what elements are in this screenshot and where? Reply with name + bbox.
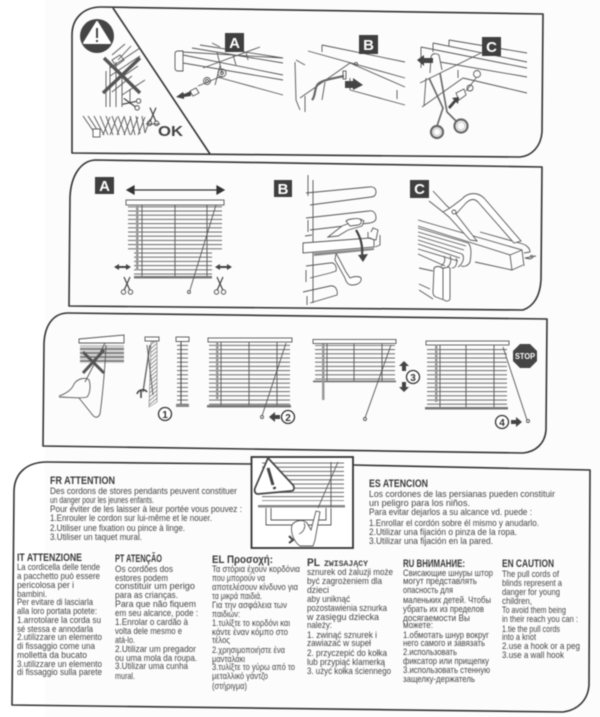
PT block: PT ATENÇÃO: [115, 552, 162, 565]
EN block: EN CAUTION: [502, 558, 554, 570]
IT block: molletta da bucato: [17, 650, 87, 660]
EL block: 1.τυλίξτε το κορδόνι και: [212, 618, 290, 628]
PT block: atá-lo.: [115, 635, 135, 645]
side view with hook: [137, 337, 159, 407]
PL block: aby uniknąć: [307, 594, 350, 604]
label B: [274, 180, 292, 198]
arrow: width: [127, 186, 224, 194]
bracket and slat detail: [303, 175, 380, 305]
EL block: Τα στόρια έχουν κορδόνια: [212, 564, 300, 574]
EN block: [502, 558, 580, 660]
label C: C: [414, 181, 425, 198]
panel 1: cut the cords: [72, 7, 543, 157]
EL block: [212, 554, 300, 691]
FR block: FR ATTENTION: [50, 475, 115, 487]
label B: B: [363, 37, 374, 54]
PL block: pozostawienia sznurka: [307, 603, 388, 613]
RU block: защелку-держатель: [403, 674, 475, 684]
PL block: 3. użyć kołka ściennego: [307, 666, 391, 676]
PL block: zawiazać w supeł: [307, 638, 371, 648]
arrow and number 2: [269, 410, 294, 424]
panel 3: operate the blind: [43, 313, 547, 453]
PL block: ZWISAJĄCY: [324, 559, 369, 569]
EL block: κάντε έναν κόμπο στο: [212, 627, 288, 637]
label C: [410, 180, 429, 198]
ES block: ES ATENCION: [369, 478, 428, 490]
PT block: estores podem: [115, 573, 168, 583]
PL block: dzieci: [307, 585, 329, 595]
PL block: sznurek od żaluzji może: [307, 567, 393, 577]
blind step 2: [207, 338, 292, 418]
EL block: μεταλλικό γάντζο: [212, 671, 268, 681]
ES block: un peligro para los niños.: [369, 498, 470, 508]
EL block: 2.χρησιμοποιήστε ένα: [212, 645, 285, 655]
ES block: 1.Enrollar el cordón sobre él mismo y anudarlo.: [369, 518, 539, 528]
IT block: bambini.: [17, 589, 47, 599]
step A illustration: [175, 43, 283, 99]
PL block: lub przypiąć klamerką: [307, 657, 386, 667]
ES block: Los cordones de las persianas pueden constituir: [369, 489, 555, 499]
EL block: που μπορούν να: [212, 573, 265, 583]
blind with crossed cord and hand: [59, 335, 124, 417]
EL block: (στήριγμα): [212, 681, 247, 691]
EL block: Για την ασφάλεια των: [212, 600, 288, 610]
icon: scissors on loop: [122, 96, 141, 110]
arrows and number 3: [399, 361, 420, 392]
arrow and number 2: 2: [285, 413, 291, 424]
IT block: pericolosa per i: [17, 580, 74, 590]
IT block: alla loro portata potete:: [17, 606, 97, 616]
RU block: фиксатор или прищепку: [403, 656, 489, 666]
RU block: [403, 558, 493, 684]
icon: stop sign: STOP: [515, 352, 536, 361]
PL block: [306, 557, 393, 676]
illustration: crossed-out cord loop: [103, 44, 145, 107]
number 1: [158, 408, 172, 421]
EL block: τα μικρά παιδιά.: [212, 591, 262, 601]
FR block: [50, 475, 242, 542]
label A: [225, 33, 244, 52]
label A: A: [229, 35, 240, 52]
FR block: Pour éviter de les laisser à leur portée vous pouvez :: [50, 504, 242, 514]
IT block: IT ATTENZIONE: [17, 552, 82, 564]
blind step 3: [313, 340, 396, 420]
FR block: 3.Utiliser un taquet mural.: [50, 532, 142, 542]
PL block: być zagrożeniem dla: [307, 576, 383, 586]
PL block: PL: [307, 557, 320, 569]
EL block: αποτελέσουν κίνδυνο για: [212, 582, 298, 592]
blind step 4: [425, 341, 530, 422]
EN block: 1.tie the pull cords: [502, 624, 560, 634]
PT block: ou uma mola da roupa.: [115, 653, 197, 663]
panel 4: translated warnings: [12, 457, 590, 712]
ES block: [369, 478, 555, 546]
text: OK: OK: [158, 123, 183, 140]
FR block: un danger pour les jeunes enfants.: [50, 495, 154, 505]
PT block: mural.: [115, 671, 135, 681]
RU block: 1.обмотать шнур вокруг: [403, 630, 490, 640]
PT block: constituir um perigo: [115, 581, 195, 591]
number 1: 1: [162, 410, 168, 421]
FR block: Des cordons de stores pendants peuvent constituer: [50, 486, 237, 496]
IT block: 2.utilizzare un elemento: [17, 632, 102, 642]
RU block: 3.использовать стенную: [403, 665, 490, 675]
EN block: 3.use a wall hook: [502, 650, 564, 660]
EN block: danger for young: [502, 587, 560, 597]
arrows and scissors right: [214, 264, 232, 294]
panel 2: fit the blind: [69, 160, 542, 310]
EL block: 3.τυλίξτε το γύρω από το: [212, 662, 295, 672]
label C: C: [486, 39, 497, 56]
icon: scissors over ok: [147, 108, 159, 126]
IT block: 1.arrotolare la corda su: [17, 615, 101, 625]
RU block: опасность для: [403, 585, 453, 595]
PT block: para as crianças.: [115, 590, 178, 600]
blind A: [126, 200, 224, 294]
RU block: него самого и завязать: [403, 638, 485, 648]
PT block: 3.Utilizar uma cunha: [115, 661, 189, 671]
EN block: 2.use a hook or a peg: [502, 641, 580, 651]
arrows and number 3: 3: [410, 373, 416, 384]
RU block: убрать их из пределов: [403, 604, 484, 614]
EL block: παιδιών:: [212, 609, 240, 619]
label C: [482, 37, 501, 56]
PL block: w zasięgu dziecka: [306, 612, 380, 622]
RU block: RU ВНИМАНИЕ:: [403, 558, 465, 570]
FR block: 2.Utiliser une fixation ou pince à linge.: [50, 523, 185, 533]
step C illustration: [417, 40, 527, 138]
IT block: di fissaggio come una: [17, 641, 96, 651]
illustration: cut cords ok: [83, 116, 160, 137]
number 4 and arrow: [496, 416, 522, 429]
IT block: sé stessa e annodarla: [17, 624, 94, 634]
PT block: em seu alcance, pode :: [115, 608, 198, 618]
icon: stop sign: [513, 344, 537, 368]
number 4 and arrow: 4: [499, 418, 505, 429]
icon: warning circle: [80, 19, 114, 53]
RU block: можете:: [403, 620, 433, 630]
label B: B: [278, 181, 289, 198]
IT block: di fissaggio sulla parete: [17, 667, 102, 677]
EL block: τέλος: [212, 635, 230, 645]
label B: [359, 35, 378, 54]
IT block: 3.utilizzare un elemento: [17, 659, 102, 669]
PT block: Os cordões dos: [115, 564, 173, 574]
EN block: blinds represent a: [502, 578, 563, 588]
rail and clip detail: [418, 191, 536, 301]
EL block: EL Προσοχή:: [212, 554, 273, 566]
PT block: 1.Enrolar o cardão à: [115, 617, 189, 627]
EL block: μανταλάκι: [212, 654, 245, 664]
ES block: Para evitar dejarlos a su alcance vd. puede :: [369, 507, 532, 517]
EN block: in their reach you can :: [502, 614, 578, 624]
PT block: volta dele mesmo e: [115, 626, 182, 636]
PL block: 2. przyczepić do kołka: [307, 648, 388, 658]
PL block: 1. zwinąć sznurek i: [307, 630, 377, 640]
EN block: children,: [502, 596, 532, 606]
EN block: into a knot: [502, 632, 536, 642]
IT block: [17, 552, 102, 677]
IT block: Per evitare di lasciarla: [17, 597, 94, 607]
arrows and scissors left: [114, 264, 133, 294]
RU block: досягаемости Вы: [403, 613, 470, 623]
IT block: a pacchetto può essere: [17, 571, 100, 581]
front narrow view: [176, 337, 189, 407]
label A: [95, 177, 114, 195]
FR block: 1.Enrouler le cordon sur lui-même et le nouer.: [50, 513, 212, 523]
PT block: 2.Utilizar um pregador: [115, 644, 196, 654]
PT block: [115, 552, 198, 681]
EN block: To avoid them being: [502, 605, 566, 615]
ES block: 3.Utilizar una fijación en la pared.: [369, 536, 493, 546]
RU block: Свисающие шнуры штор: [403, 568, 493, 578]
RU block: 2.использовать: [403, 647, 457, 657]
step B illustration: [295, 45, 405, 112]
ES block: 2.Utilizar una fijación o pinza de la ropa.: [369, 527, 517, 537]
RU block: маленьких детей. Чтобы: [403, 595, 491, 605]
warning picture: [252, 457, 353, 548]
label A: A: [99, 178, 110, 195]
IT block: La cordicella delle tende: [17, 562, 100, 572]
RU block: могут представлять: [403, 576, 477, 586]
PT block: Para que não fiquem: [115, 599, 196, 609]
PL block: należy:: [307, 620, 332, 630]
EN block: The pull cords of: [502, 569, 559, 579]
